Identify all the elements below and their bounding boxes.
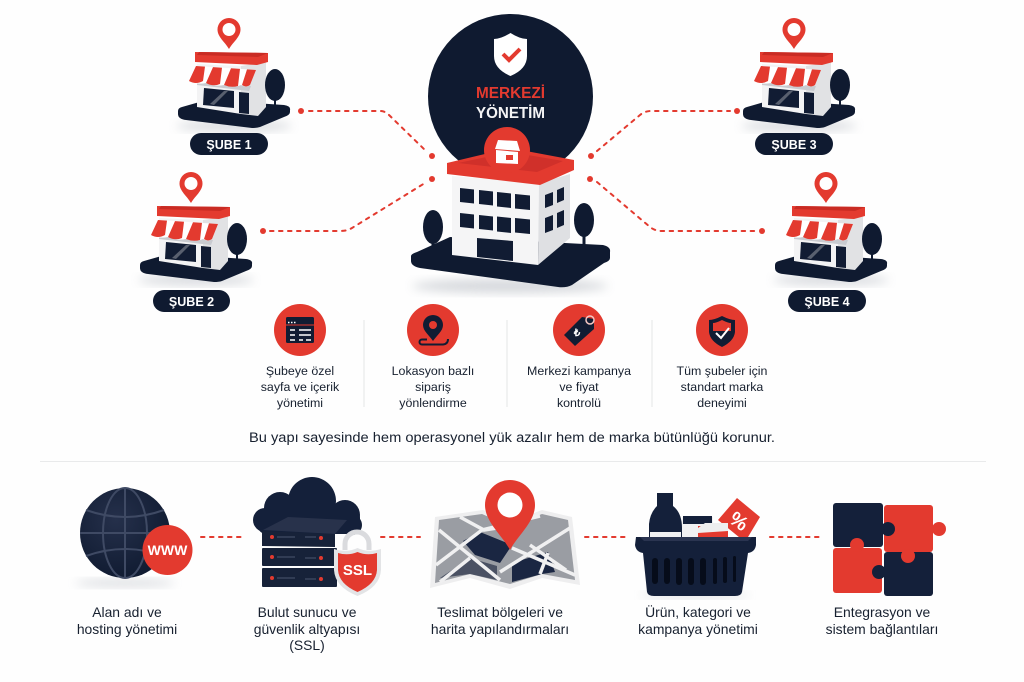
heading: Merkezi: MERKEZİ [476,85,545,102]
branch: Şube 3 [741,18,857,155]
text: yönetimi [277,396,323,410]
label pill: ŞUBE 4 [804,295,850,309]
heading: Yönetim: YÖNETİM [476,105,545,122]
icon: cloud server with SSL shield [253,477,381,596]
icon: cloud server with SSL shield: SSL [343,562,372,579]
text: kontrolü [557,396,601,410]
item: delivery zones and maps [430,480,580,637]
text: standart marka [681,380,763,394]
text: Bulut sunucu ve [258,604,357,620]
text [77,604,177,637]
text: Şubeye özel [266,364,334,378]
store illustration [138,172,254,285]
text: sayfa ve içerik [261,380,340,394]
icon: globe with www: WWW [148,542,188,558]
text: Alan adı ve [92,604,162,620]
text [431,604,569,637]
branch: Şube 1 [176,18,292,155]
text: kampanya yönetimi [638,621,758,637]
item: domain and hosting [75,488,192,637]
text [254,604,360,653]
icon: route pin [407,304,459,356]
text: Lokasyon bazlı [392,364,474,378]
text: Teslimat bölgeleri ve [437,604,563,620]
icon: map with pin [430,480,580,589]
label pill: ŞUBE 1 [206,138,252,152]
icon: puzzle pieces [833,503,946,596]
icon: shopping basket: % [725,508,752,536]
text [826,604,938,637]
text: sistem bağlantıları [826,621,938,637]
icon: price tag: ₺ [573,328,581,339]
icon: shield with check [494,33,527,76]
text: (SSL) [289,637,325,653]
feature: branch page management [261,304,340,410]
connector: Şube 2 to center [260,176,435,234]
text [261,364,340,410]
text: deneyimi [697,396,747,410]
text: Ürün, kategori ve [645,603,751,620]
headquarters building [411,127,610,293]
icon: storefront badge [484,127,530,173]
label pill: ŞUBE 2 [169,295,214,309]
icon: brand shield [696,304,748,356]
item: integrations [826,503,946,637]
text: hosting yönetimi [77,621,177,637]
branch: Şube 4 [773,172,889,312]
connectors: bottom row [201,536,820,538]
feature: standard brand experience [677,304,768,410]
feature: campaign and price control [527,304,631,410]
text [527,364,631,410]
icon: shopping basket [635,493,760,598]
label pill: ŞUBE 3 [771,138,817,152]
central management hub [411,14,610,293]
store illustration [773,172,889,285]
item: products and campaigns [635,493,760,637]
feature: location routing [392,304,474,410]
text: sipariş [415,380,451,394]
text [638,603,758,637]
summary sentence: Bu yapı sayesinde hem operasyonel yük azalır hem de marka bütünlüğü korunur. [249,430,775,445]
connector: Şube 3 to center [588,108,740,159]
text: ve fiyat [559,380,599,394]
text [392,364,474,410]
text: harita yapılandırmaları [431,621,569,637]
branch: Şube 2 [138,172,254,312]
dark circle badge [428,14,593,179]
connector: Şube 1 to center [298,108,435,159]
text: Tüm şubeler için [677,364,768,378]
icon: web page [274,304,326,356]
text: yönlendirme [399,396,467,410]
text: Merkezi kampanya [527,364,631,378]
text: güvenlik altyapısı [254,621,360,637]
icon: globe with www [75,488,192,587]
text [677,364,768,410]
connector: Şube 4 to center [587,176,765,234]
text: Entegrasyon ve [834,604,931,620]
item: cloud server and SSL [253,477,381,653]
store illustration [741,18,857,131]
store illustration [176,18,292,131]
